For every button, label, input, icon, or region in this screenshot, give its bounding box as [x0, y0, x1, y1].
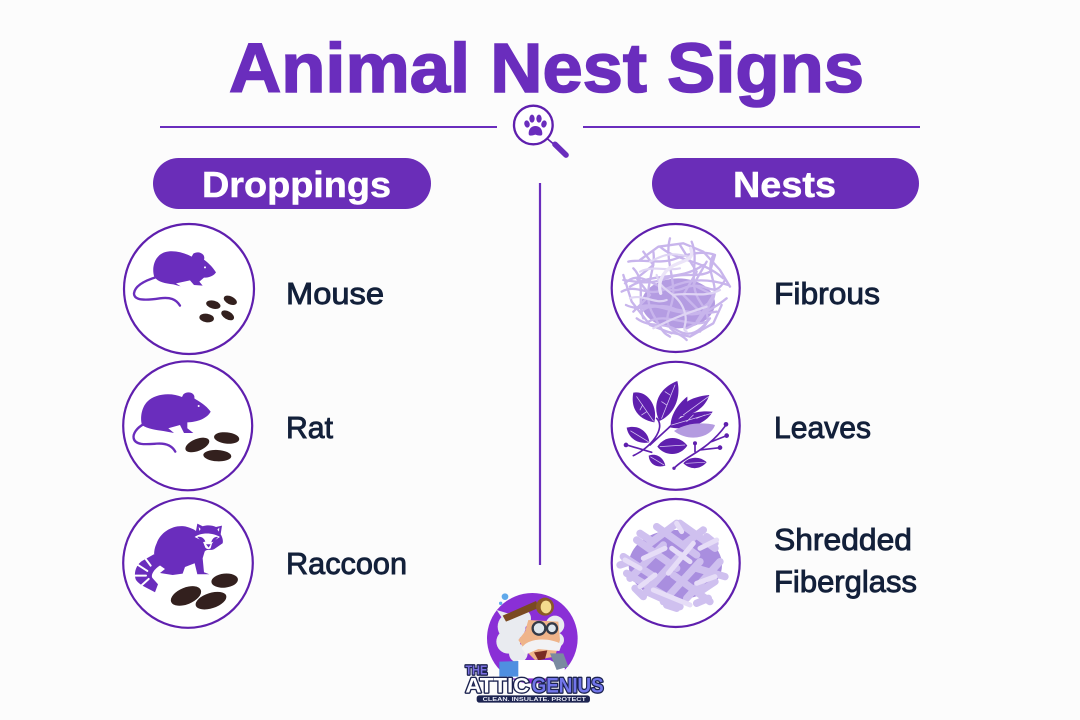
label: Fibrous: Fibrous: [774, 276, 880, 311]
heading pill: Nests: Nests: [733, 164, 836, 205]
heading pill: Droppings: [153, 158, 431, 209]
icon: mouse: [134, 251, 216, 306]
panel: mouse droppings: [124, 224, 254, 354]
mascot headlamp: [536, 598, 554, 616]
heading pill: Nests: [652, 158, 919, 209]
panel: shredded fiberglass nest: [612, 499, 740, 627]
icon: magnifying glass with paw print: [514, 106, 566, 155]
logo wordmark: [465, 663, 604, 697]
logo: The Attic Genius: [465, 593, 604, 703]
label: Shredded Fiberglass: Shredded: [774, 522, 912, 557]
label: Rat: Rat: [286, 410, 333, 445]
label: Leaves: Leaves: [774, 410, 871, 445]
label: Raccoon: Raccoon: [286, 546, 407, 581]
panel: leaves nest: [612, 362, 740, 490]
mascot face: [518, 620, 560, 660]
icon: raccoon droppings: [168, 572, 239, 613]
logo wordmark: GENIUS: [532, 673, 604, 697]
panel: fibrous nest: [612, 224, 740, 352]
icon: fibrous nest: [622, 238, 730, 340]
logo: The Attic Genius: CLEAN. INSULATE. PROTECT: [483, 697, 587, 703]
logo wordmark: THE: [465, 663, 487, 677]
logo wordmark: ATTIC: [465, 673, 529, 697]
icon: mouse droppings: [199, 294, 238, 323]
panel: raccoon droppings: [123, 498, 253, 628]
label: Shredded Fiberglass: [774, 522, 917, 599]
heading pill: Droppings: Droppings: [202, 164, 391, 205]
label: Mouse: Mouse: [286, 276, 384, 311]
mascot hair: [496, 609, 564, 663]
icon: shredded fiberglass: [620, 523, 725, 608]
icon: raccoon: [135, 524, 223, 592]
icon: leaves: [624, 381, 729, 470]
label: Shredded Fiberglass: Fiberglass: [774, 564, 917, 599]
icon: rat droppings: [183, 431, 240, 462]
panel: rat droppings: [123, 361, 252, 490]
icon: rat: [134, 392, 211, 452]
title: Animal Nest Signs: [229, 29, 864, 107]
